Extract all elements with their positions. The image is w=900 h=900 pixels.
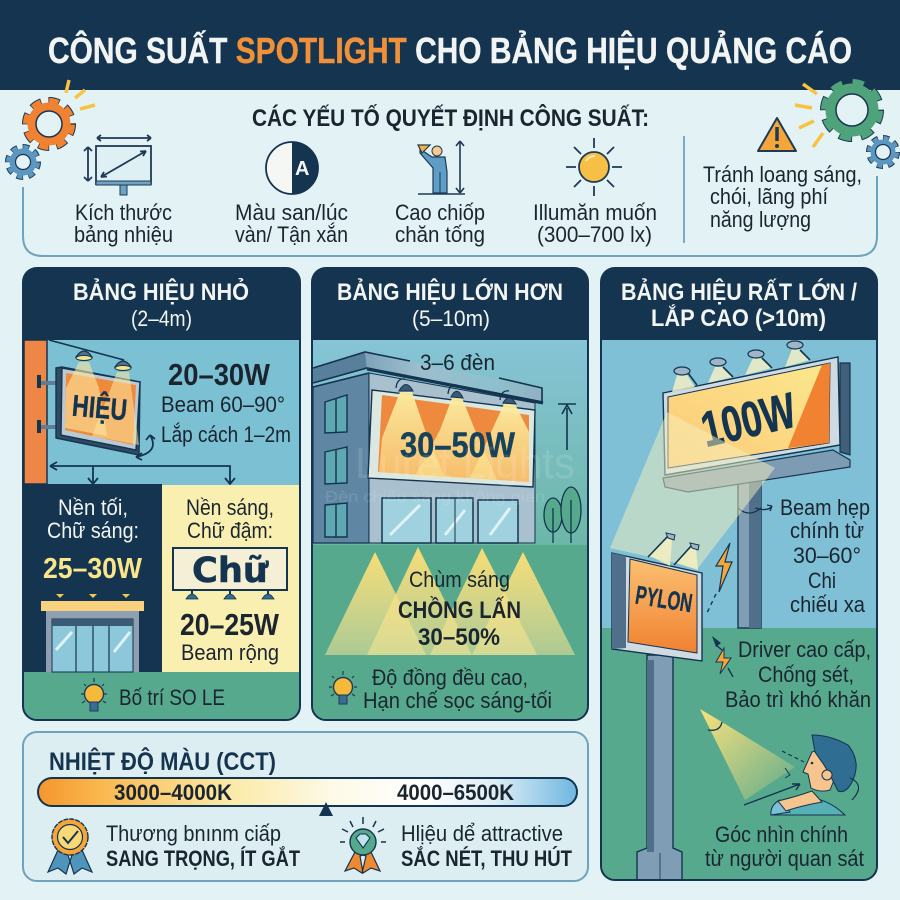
heading: factors: CÁC YẾU TỐ QUYẾT ĐỊNH CÔNG SUẤT: <box>252 104 649 132</box>
beam text: Beam hẹp <box>780 495 870 520</box>
tip: staggered layout <box>81 678 225 711</box>
icon: light bulb <box>329 671 357 704</box>
icon: person measuring height <box>418 141 465 194</box>
label: illuminance <box>533 200 657 247</box>
tip: staggered layout: Bố trí SO LE <box>119 685 225 710</box>
icon: half black half white contrast <box>266 142 318 194</box>
benefit text: Hạn chế sọc sáng-tối <box>363 688 552 713</box>
watermark: Luret Lights <box>355 439 575 488</box>
cool text <box>401 821 572 871</box>
driver text: Driver cao cấp, <box>738 637 871 662</box>
header: very large sign: LẮP CAO (>10m) <box>651 304 826 332</box>
header: very large sign: BẢNG HIỆU RẤT LỚN / <box>621 277 857 306</box>
observer text: từ người quan sát <box>705 846 864 871</box>
panel: larger sign <box>312 268 588 720</box>
arrow: height marker <box>558 404 576 450</box>
arrow: beam angle <box>755 505 772 511</box>
sub-panel: dark background, light letters: Nền tối, <box>58 495 128 520</box>
icon: light bulb <box>81 678 107 711</box>
wall <box>24 340 47 484</box>
icon: warning triangle <box>758 118 796 151</box>
watermark: Đèn chiếu sáng không gian <box>325 489 545 506</box>
callout: 20-30W specs: 20–30W <box>168 357 271 392</box>
sub-panel: light background, dark letters: Nền sáng, <box>186 495 274 520</box>
heading: CCT: NHIỆT ĐỘ MÀU (CCT) <box>49 746 276 776</box>
illustration: storefront <box>41 594 144 672</box>
sub-panel: light background, dark letters: Beam rộng <box>181 640 279 665</box>
icon: orange gear with rays <box>27 80 95 146</box>
header: small sign: BẢNG HIỆU NHỎ <box>73 277 249 306</box>
warm text <box>106 821 300 871</box>
arrows: branch to two cases <box>50 435 235 484</box>
sub-panel: light background, dark letters: 20–25W <box>180 607 280 642</box>
driver text: Bảo trì khó khăn <box>725 687 871 712</box>
title banner <box>0 0 900 90</box>
cool text: Hlịệu dể attractive <box>401 821 563 846</box>
header: very large sign <box>601 268 877 340</box>
header: larger sign <box>312 268 588 340</box>
sign: Chữ: Chữ <box>192 551 269 591</box>
sub-panel: dark background, light letters <box>24 484 162 672</box>
overlap text: 30–50% <box>418 624 500 651</box>
beam text: 30–60° <box>793 543 861 568</box>
warm text: SANG TRỌNG, ÍT GẮT <box>106 846 300 871</box>
gradient bar <box>38 778 577 806</box>
label: mounting height: Cao chiốp <box>395 200 485 225</box>
sub-panel: light background, dark letters: Chữ đậm: <box>187 518 273 543</box>
label: illuminance: Illumăn muốn <box>533 200 657 225</box>
warning text: Tránh loang sáng, <box>703 162 862 187</box>
beam text: chiếu xa <box>790 592 866 617</box>
header: small sign <box>23 268 300 340</box>
icon: small blue gear right <box>870 139 896 165</box>
icon: small blue gear left <box>9 148 37 176</box>
sign: Chữ <box>173 548 287 599</box>
overlap text <box>398 567 521 651</box>
warning text <box>703 162 862 232</box>
panel: small sign <box>23 268 300 720</box>
illustration: large billboard with lamps <box>663 341 850 492</box>
label: colour <box>235 200 348 247</box>
illustration: pole <box>738 477 761 628</box>
callout: 20-30W specs: Lắp cách 1–2m <box>161 422 291 447</box>
label: mounting height <box>395 200 485 247</box>
benefit text: Độ đồng đều cao, <box>372 665 528 690</box>
sub-panel: dark background, light letters: Chữ sáng: <box>47 518 139 543</box>
illustration: large billboard with lamps: 100W <box>696 382 802 458</box>
driver text: Chống sét, <box>758 662 854 687</box>
label: sign size: Kích thước <box>75 200 172 225</box>
icon: medal cool <box>340 817 386 873</box>
light beam to pylon <box>610 412 775 568</box>
overlap text: Chùm sáng <box>409 567 510 592</box>
observer text <box>705 822 864 871</box>
cool text: SẮC NÉT, THU HÚT <box>401 846 572 871</box>
driver text <box>725 637 871 712</box>
label: illuminance: (300–700 lx) <box>537 222 652 247</box>
icon: lightning upper <box>706 543 732 615</box>
warm text: Thương bnınm ciấp <box>106 821 281 846</box>
warning text: năng lượng <box>710 207 811 232</box>
observer text: Góc nhìn chính <box>715 822 848 847</box>
gradient bar: 4000–6500K <box>397 780 514 805</box>
panel: very large sign <box>601 268 877 880</box>
header: small sign: (2–4m) <box>131 306 192 331</box>
icon: sun <box>566 138 622 196</box>
illustration: pylon sign <box>612 533 702 880</box>
callout: 20-30W specs <box>161 357 291 447</box>
label: sign size <box>74 200 173 247</box>
header: larger sign: BẢNG HIỆU LỚN HƠN <box>337 277 563 306</box>
beam text: chính từ <box>790 518 864 543</box>
label: colour: vàn/ Tận xắn <box>235 222 348 247</box>
illustration: building with billboard <box>313 352 543 543</box>
illustration: wall sign with lamps: HIỆU <box>71 389 129 427</box>
illustration: building with billboard: 30–50W <box>400 426 515 465</box>
sub-panel: light background, dark letters <box>162 485 299 672</box>
beam text: Chi <box>808 568 836 593</box>
marker triangle <box>319 802 333 816</box>
benefit text <box>363 665 552 713</box>
panel: factors that decide wattage <box>9 80 896 256</box>
diagram: overlapping beams <box>325 547 575 655</box>
beam text <box>780 495 870 617</box>
label: 3-6 lamps: 3–6 đèn <box>420 350 495 375</box>
label: mounting height: chăn tống <box>395 222 485 247</box>
gradient bar: 3000–4000K <box>114 780 232 805</box>
icon: trees <box>544 487 581 543</box>
header: larger sign: (5–10m) <box>412 306 490 331</box>
illustration: pylon sign: PYLON <box>633 580 694 618</box>
icon: half black half white contrast: A <box>295 158 309 180</box>
label: sign size: bảng nhiệu <box>74 222 173 247</box>
illustration: wall sign with lamps <box>39 340 140 455</box>
panel: colour temperature <box>23 732 588 881</box>
sub-panel: dark background, light letters: 25–30W <box>43 553 143 585</box>
watermark <box>325 439 575 506</box>
divider <box>683 136 685 243</box>
overlap text: CHỒNG LẤN <box>398 596 521 624</box>
icon: medal warm <box>48 819 92 874</box>
icon: lightning lower <box>712 636 733 677</box>
callout: 20-30W specs: Beam 60–90° <box>161 392 285 417</box>
icon: billboard size <box>84 135 151 195</box>
illustration: viewing cone and observer <box>700 709 859 815</box>
warning text: chói, lãng phí <box>710 184 828 209</box>
icon: green gear with rays <box>795 83 879 147</box>
label: colour: Màu san/lúc <box>235 200 348 225</box>
